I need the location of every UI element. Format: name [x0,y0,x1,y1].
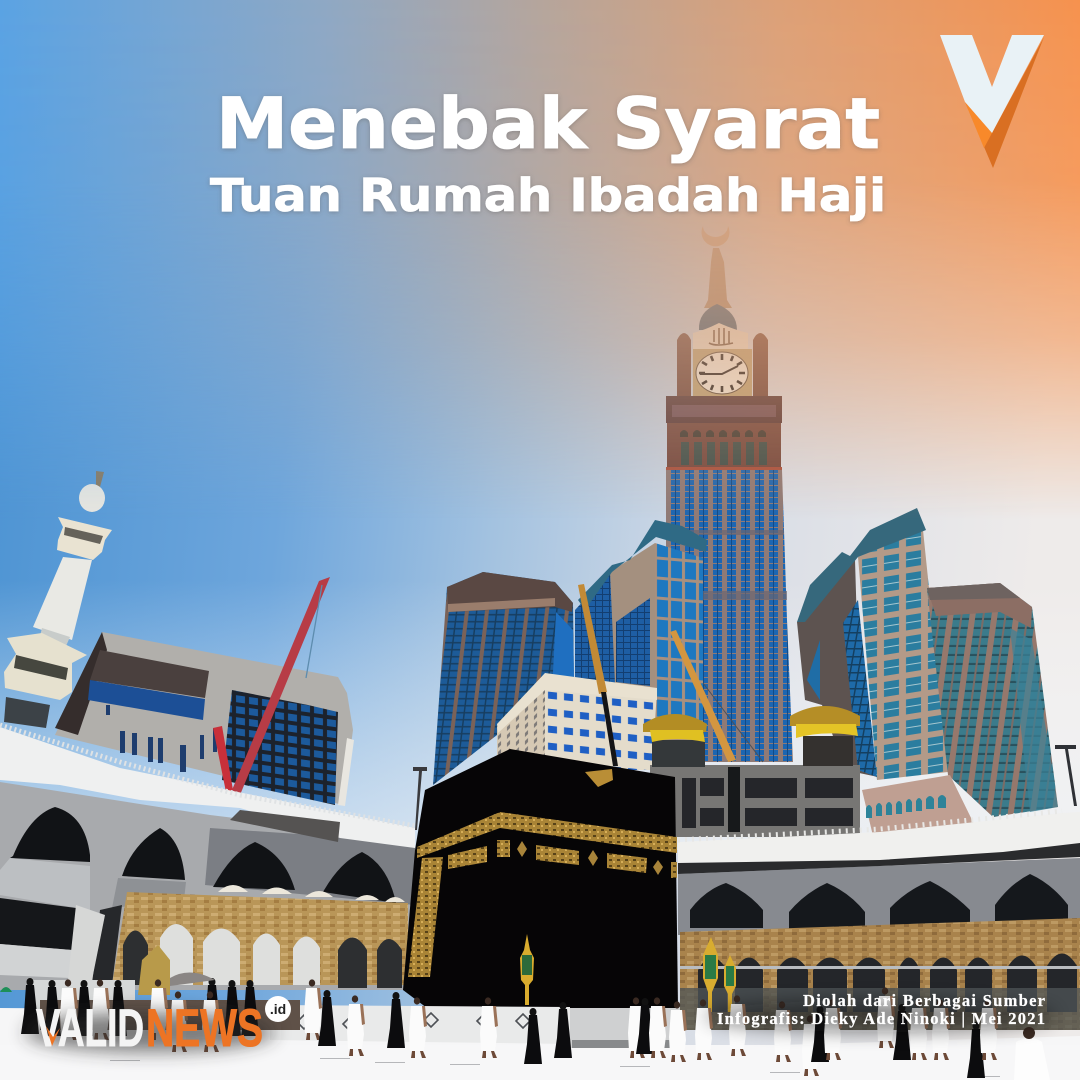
title line 2: Tuan Rumah Ibadah Haji [210,169,886,222]
yellow crane left [578,584,618,766]
front beige building [497,673,657,770]
id badge [265,996,291,1022]
end wing [338,738,354,806]
minaret base [4,697,50,728]
low wall [270,1005,680,1048]
tower shaft [666,470,793,762]
logo chevron [46,1026,60,1046]
deck underside [230,810,340,842]
white domes [218,885,405,902]
left wall [0,782,415,990]
beam [680,966,1080,969]
left hotel building [55,632,354,806]
lower opening tone [680,988,1080,1030]
hanging lamp [520,934,534,1005]
minaret [4,471,112,728]
shaft [33,557,92,640]
right face [545,680,657,770]
logo word orange: NEWS [146,999,263,1058]
cornice [497,673,657,733]
far right tower [927,583,1058,817]
side face [610,543,655,690]
gold belt [417,812,677,858]
arches [698,954,1077,1012]
lower gallery [4,633,87,700]
wall ornaments [297,1013,530,1031]
icon: V logo [940,35,1044,168]
street lamp right [1055,745,1077,806]
validnews logo [36,999,263,1058]
credit shade [705,1000,1055,1032]
front face [655,543,703,760]
blue window band [88,680,205,720]
twin green lamps [703,937,736,1012]
gold scaffold left [643,714,707,742]
left gold arcade [112,885,408,988]
pilgrims [304,979,1050,1080]
clock tower [666,226,793,762]
crescent finial [702,226,730,246]
dome [699,304,737,330]
credits [717,991,1045,1028]
green umbrella [0,987,12,992]
gold door curtain [408,857,443,977]
logo word white: VALID [36,999,144,1058]
upper gallery [57,517,112,560]
lower balcony [0,944,72,978]
outer wing [797,560,878,777]
right crown tower [797,508,948,780]
right arcade wall [678,858,1080,935]
finial [96,471,104,487]
dark left corner [55,632,107,735]
yellow crane right [670,630,763,762]
source line: Diolah dari Berbagai Sumber [803,991,1045,1010]
left arcade [0,782,415,990]
lower dark opening [0,898,76,950]
pier [68,905,105,980]
crowd behind logo [21,972,300,1052]
dark arcade strip [90,650,209,698]
gold spout [585,769,613,787]
dark soffit [678,843,1080,874]
crown tower centre-left [575,520,707,760]
spire [704,248,732,308]
right gold arcade [680,918,1080,1030]
railing [0,725,415,826]
balcony panel [0,858,90,910]
scalloped roof [578,520,707,610]
calligraphy mark [709,328,733,345]
gold scaffold right [790,706,860,738]
clock face [696,352,748,394]
dome [79,484,105,512]
left wing [575,570,622,690]
orange blue gradient overlay [0,0,1080,520]
title [210,83,886,222]
logo backdrop [25,1012,275,1052]
arches [160,924,320,985]
title line 1: Menebak Syarat [216,83,880,165]
small windows [106,705,217,772]
arch openings [10,807,396,903]
red crane [213,577,330,795]
white floor [0,1008,1080,1080]
maqam gold shrine [138,945,170,995]
pale back wall [30,980,135,1010]
kaaba [403,749,678,1008]
id badge: .id [270,1001,286,1017]
left face [497,680,545,770]
gold panels [448,840,677,878]
white terrace right [678,811,1080,874]
upper band [666,396,782,471]
street lamp centre [413,767,427,830]
black glazed block [222,690,338,805]
second panel [112,878,186,908]
calligraphy gable [693,323,748,349]
shaft bands [666,530,787,600]
corner turrets [677,333,768,396]
author line: Infografis: Dieky Ade Ninoki | Mei 2021 [717,1009,1045,1028]
arch openings [690,874,1068,930]
construction block [650,736,860,837]
scalloped roof [797,508,926,622]
pink podium [862,775,975,836]
railing [678,811,1062,840]
background left tower [433,572,574,785]
clock face panel [693,349,752,396]
dark wall [205,828,415,905]
gold medallions [517,841,663,875]
kiswah cloth [403,749,678,1008]
front face [858,530,948,780]
white terrace left [0,725,415,848]
